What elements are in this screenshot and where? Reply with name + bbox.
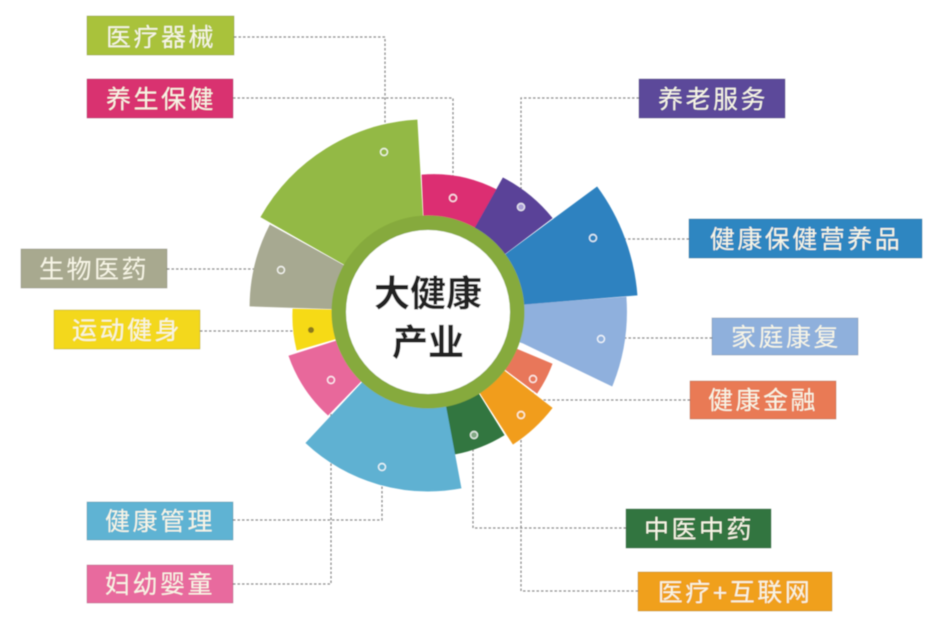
center disc (346, 230, 510, 394)
label: 健康金融: 健康金融 (708, 387, 818, 415)
label: 养老服务: 养老服务 (658, 86, 768, 114)
connector lines (167, 37, 712, 591)
label: 运动健身 (54, 310, 200, 349)
label: 生物医药 (21, 249, 167, 288)
sector: 中医中药 (428, 312, 504, 454)
label: 妇幼婴童 (87, 565, 233, 603)
sector: 医疗+互联网 (428, 312, 552, 444)
label: 养老服务 (639, 79, 785, 118)
sector: 生物医药 (250, 225, 428, 312)
sunburst chart (250, 120, 637, 491)
anchor dots (278, 148, 604, 470)
label: 医疗+互联网: 医疗+互联网 (658, 579, 812, 607)
label: 生物医药: 生物医药 (39, 256, 149, 284)
label: 健康管理 (87, 502, 233, 540)
sector: 健康金融 (428, 312, 552, 393)
label: 妇幼婴童: 妇幼婴童 (105, 571, 215, 599)
label: 养生保健 (87, 79, 233, 118)
label: 家庭康复 (712, 318, 858, 355)
sector: 健康保健营养品 (428, 187, 637, 312)
sector: 养老服务 (428, 178, 552, 312)
label: 中医中药: 中医中药 (644, 516, 754, 544)
sector: 医疗器械 (261, 120, 428, 312)
label: 健康保健营养品: 健康保健营养品 (710, 226, 902, 254)
label: 健康管理: 健康管理 (105, 508, 215, 536)
label: 医疗器械: 医疗器械 (106, 24, 216, 52)
label: 医疗器械 (87, 16, 234, 55)
sector: 养生保健 (422, 175, 497, 312)
sector: 妇幼婴童 (289, 312, 428, 415)
sector: 健康管理 (306, 312, 461, 491)
center ring (332, 216, 524, 408)
label: 家庭康复: 家庭康复 (731, 324, 841, 352)
label: 运动健身: 运动健身 (72, 317, 182, 345)
center title: 产业 (392, 322, 464, 363)
label: 健康金融 (690, 381, 836, 419)
label: 养生保健: 养生保健 (106, 86, 216, 114)
center title (374, 273, 482, 363)
sector: 运动健身 (293, 309, 428, 350)
sector: 家庭康复 (428, 297, 627, 386)
label: 医疗+互联网 (638, 572, 832, 611)
label: 中医中药 (626, 509, 771, 548)
center title: 大健康 (374, 273, 482, 314)
label: 健康保健营养品 (689, 219, 922, 258)
